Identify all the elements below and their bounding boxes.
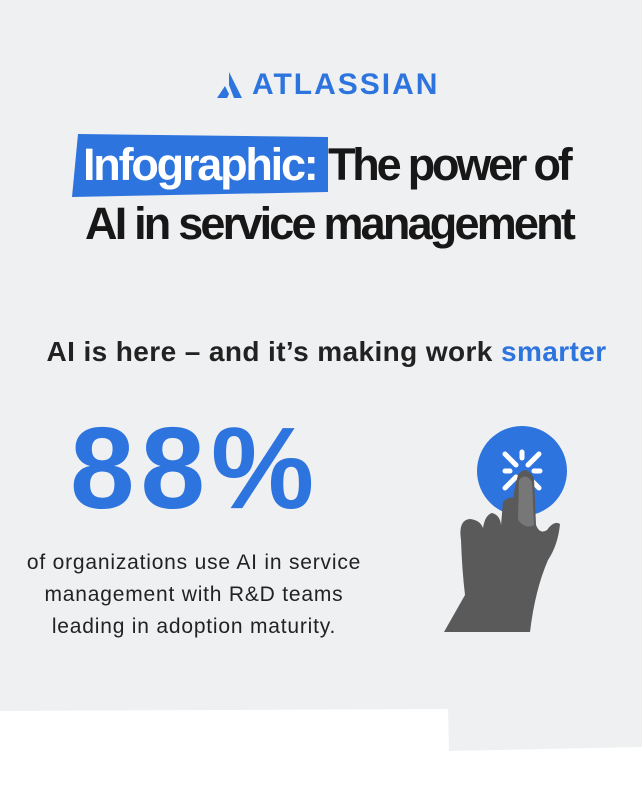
title: [72, 134, 576, 249]
stat description: leading in adoption maturity.: [52, 615, 336, 638]
stat description: management with R&D teams: [45, 583, 343, 606]
icon: atlassian mark: [217, 72, 242, 98]
illustration: hand pressing AI button: [444, 426, 567, 632]
stat description: of organizations use AI in service: [27, 551, 361, 574]
logo: [217, 68, 439, 101]
stat description: [27, 551, 361, 638]
title highlight box: [72, 134, 328, 197]
icon: blue circle with sparkle: [477, 426, 567, 516]
stat: 88%: 88%: [70, 403, 320, 533]
subtitle: AI is here – and it’s making work smarter: [46, 336, 606, 367]
bottom white band: [0, 709, 642, 788]
brand name: ATLASSIAN: [252, 68, 439, 101]
title: Infographic:: [83, 139, 317, 190]
hand: [444, 470, 560, 632]
title: The power of: [328, 139, 570, 190]
title: AI in service management: [85, 198, 573, 249]
